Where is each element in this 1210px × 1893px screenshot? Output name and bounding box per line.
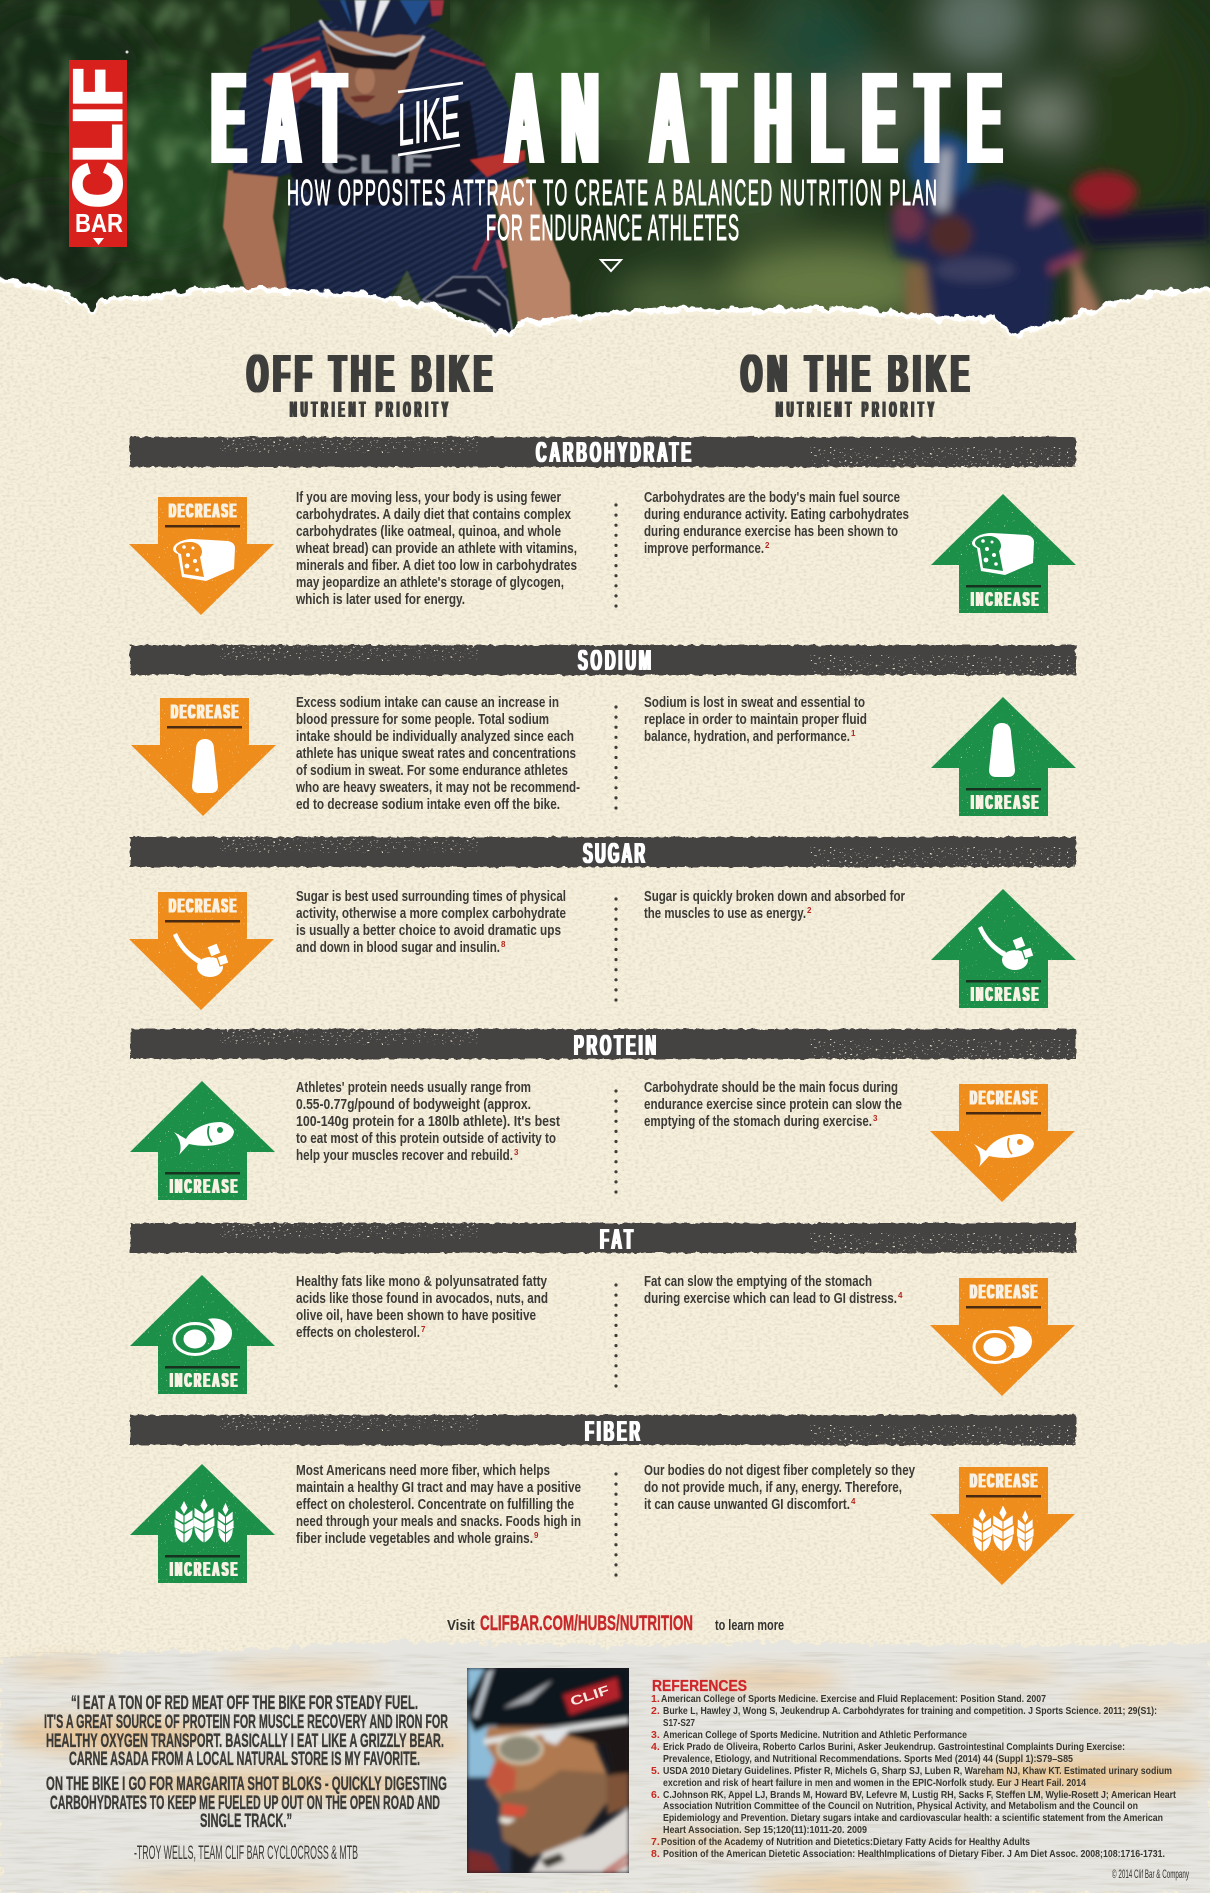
subtitle bbox=[287, 173, 937, 248]
section bar: sugar: SUGAR bbox=[583, 836, 645, 869]
section bar: sodium bbox=[130, 643, 1076, 676]
text: carbohydrate off the bike: minerals and fiber. A diet too low in carbohydrates bbox=[296, 558, 577, 574]
references: Erick Prado de Oliveira, Roberto Carlos Burini, Asker Jeukendrup. Gastrointestinal Complaints During Exercise: bbox=[663, 1741, 1125, 1753]
arrow: decrease with avocado icon: DECREASE bbox=[970, 1282, 1037, 1304]
arrow: increase with avocado icon: INCREASE bbox=[170, 1370, 237, 1392]
text: carbohydrate off the bike: may jeopardize an athlete's storage of glycogen, bbox=[296, 575, 564, 591]
dotted divider bbox=[614, 707, 618, 809]
text: sodium off the bike: who are heavy sweaters, it may not be recommend- bbox=[295, 780, 580, 796]
text: fat on the bike: 4 bbox=[898, 1291, 903, 1300]
arrow: decrease with bread icon bbox=[129, 497, 274, 615]
rider quote: IT'S A GREAT SOURCE OF PROTEIN FOR MUSCLE RECOVERY AND IRON FOR bbox=[44, 1712, 448, 1733]
references: 8. bbox=[651, 1848, 660, 1860]
text: sugar on the bike bbox=[644, 889, 905, 922]
text: fat off the bike: Healthy fats like mono & polyunsatrated fatty bbox=[296, 1274, 547, 1290]
text: fat off the bike: acids like those found in avocados, nuts, and bbox=[296, 1291, 548, 1307]
text: protein on the bike bbox=[644, 1080, 902, 1130]
text: sodium on the bike: replace in order to maintain proper fluid bbox=[644, 712, 867, 728]
call to action: visit link: to learn more bbox=[715, 1617, 784, 1634]
arrow: decrease with fish icon bbox=[930, 1084, 1075, 1202]
text: fat off the bike: 7 bbox=[421, 1325, 426, 1334]
dotted divider bbox=[614, 1474, 618, 1576]
arrow: increase with wheat icon: INCREASE bbox=[170, 1559, 237, 1581]
photo: rider portrait: CLIF bbox=[568, 1682, 611, 1709]
references bbox=[651, 1678, 1176, 1860]
references: 7. bbox=[651, 1836, 660, 1848]
references: 5. bbox=[651, 1765, 660, 1777]
arrow: increase with fish icon: INCREASE bbox=[170, 1176, 237, 1198]
column heading: on the bike: ON THE BIKE bbox=[741, 344, 969, 405]
dotted divider bbox=[614, 1091, 618, 1193]
text: protein off the bike: 100-140g protein for a 180lb athlete). It's best bbox=[296, 1114, 560, 1130]
icon: down triangle bbox=[601, 260, 621, 271]
references: Position of the Academy of Nutrition and Dietetics:Dietary Fatty Acids for Healthy Adults bbox=[661, 1836, 1030, 1848]
dotted divider bbox=[614, 1285, 618, 1387]
text: sugar on the bike: 2 bbox=[807, 906, 812, 915]
text: sugar off the bike: and down in blood sugar and insulin. bbox=[296, 940, 500, 956]
text: protein off the bike: Athletes' protein needs usually range from bbox=[296, 1080, 531, 1096]
text: carbohydrate off the bike: carbohydrates (like oatmeal, quinoa, and whole bbox=[296, 524, 561, 540]
arrow: increase with salt shaker icon: INCREASE bbox=[971, 792, 1038, 814]
text: sodium on the bike: balance, hydration, and performance. bbox=[644, 729, 850, 745]
text: sugar on the bike: the muscles to use as energy. bbox=[644, 906, 806, 922]
arrow: increase with salt shaker icon bbox=[931, 697, 1076, 816]
arrow: increase with wheat icon bbox=[130, 1464, 275, 1583]
text: carbohydrate off the bike: wheat bread) can provide an athlete with vitamins, bbox=[295, 541, 577, 557]
text: sodium off the bike bbox=[295, 695, 580, 813]
text: sugar off the bike bbox=[296, 889, 566, 956]
text: protein on the bike: endurance exercise since protein can slow the bbox=[644, 1097, 902, 1113]
section: protein bbox=[130, 1028, 1076, 1202]
text: fiber off the bike: Most Americans need more fiber, which helps bbox=[296, 1463, 550, 1479]
references: Prevalence, Etiology, and Nutritional Recommendations. Sports Med (2014) 44 (Suppl 1):S79–S85 bbox=[663, 1753, 1073, 1765]
text: fat off the bike: effects on cholesterol. bbox=[296, 1325, 420, 1341]
title bbox=[212, 44, 1001, 191]
section bar: fiber bbox=[130, 1414, 1076, 1447]
text: sodium off the bike: ed to decrease sodium intake even off the bike. bbox=[296, 797, 560, 813]
section: fiber bbox=[130, 1414, 1076, 1585]
title: LIKE bbox=[398, 82, 460, 159]
arrow: decrease with sugar spoon icon: DECREASE bbox=[169, 896, 236, 918]
subtitle: FOR ENDURANCE ATHLETES bbox=[486, 208, 739, 248]
rider quote: ON THE BIKE I GO FOR MARGARITA SHOT BLOKS - QUICKLY DIGESTING bbox=[46, 1774, 447, 1795]
text: fat on the bike: Fat can slow the emptying of the stomach bbox=[644, 1274, 872, 1290]
dotted divider bbox=[614, 899, 618, 1001]
section: sodium bbox=[130, 643, 1076, 816]
references: 4. bbox=[651, 1741, 660, 1753]
arrow: decrease with salt shaker icon bbox=[131, 698, 276, 816]
wood footer background bbox=[0, 1642, 1210, 1893]
text: sugar off the bike: 8 bbox=[501, 940, 506, 949]
text: protein off the bike bbox=[296, 1080, 560, 1164]
section bar: carbohydrate bbox=[130, 435, 1076, 468]
section bar: sodium: SODIUM bbox=[578, 643, 651, 676]
column heading: on the bike: NUTRIENT PRIORITY bbox=[776, 397, 934, 422]
title: EAT bbox=[212, 44, 345, 191]
text: carbohydrate on the bike: during endurance activity. Eating carbohydrates bbox=[644, 507, 909, 523]
text: sodium off the bike: of sodium in sweat. For some endurance athletes bbox=[296, 763, 568, 779]
text: fiber off the bike bbox=[296, 1463, 581, 1547]
rider quote: SINGLE TRACK.” bbox=[200, 1811, 292, 1832]
text: protein on the bike: emptying of the stomach during exercise. bbox=[644, 1114, 872, 1130]
text: fiber off the bike: fiber include vegetables and whole grains. bbox=[296, 1531, 533, 1547]
section bar: fat bbox=[130, 1222, 1076, 1255]
rider quote: “I EAT A TON OF RED MEAT OFF THE BIKE FOR STEADY FUEL. bbox=[71, 1693, 418, 1714]
title: AN bbox=[506, 44, 598, 191]
word: like bbox=[398, 82, 463, 159]
arrow: decrease with salt shaker icon: DECREASE bbox=[171, 702, 238, 724]
torn paper edge bbox=[0, 270, 1210, 360]
references: 2. bbox=[651, 1705, 660, 1717]
references: 6. bbox=[651, 1789, 660, 1801]
text: carbohydrate on the bike: during endurance exercise has been shown to bbox=[644, 524, 898, 540]
arrow: decrease with bread icon: DECREASE bbox=[169, 501, 236, 523]
text: fat off the bike: olive oil, have been shown to have positive bbox=[296, 1308, 536, 1324]
text: protein off the bike: 0.55-0.77g/pound of bodyweight (approx. bbox=[296, 1097, 531, 1113]
text: protein off the bike: help your muscles recover and rebuild. bbox=[296, 1148, 513, 1164]
rider quote: HEALTHY OXYGEN TRANSPORT. BASICALLY I EAT LIKE A GRIZZLY BEAR. bbox=[46, 1731, 444, 1752]
call to action: visit link: CLIFBAR.COM/HUBS/NUTRITION bbox=[480, 1612, 693, 1635]
arrow: decrease with fish icon: DECREASE bbox=[970, 1088, 1037, 1110]
arrow: decrease with wheat icon: DECREASE bbox=[970, 1471, 1037, 1493]
text: carbohydrate on the bike: Carbohydrates are the body's main fuel source bbox=[644, 490, 900, 506]
text: fiber on the bike: 4 bbox=[851, 1497, 856, 1506]
text: sodium on the bike: 1 bbox=[851, 729, 856, 738]
text: sodium off the bike: Excess sodium intake can cause an increase in bbox=[296, 695, 559, 711]
references: 3. bbox=[651, 1729, 660, 1741]
rider quote bbox=[44, 1693, 448, 1864]
references: REFERENCES bbox=[652, 1678, 747, 1695]
references: S17-S27 bbox=[663, 1717, 695, 1729]
text: protein on the bike: 3 bbox=[873, 1114, 878, 1123]
text: sodium on the bike bbox=[644, 695, 867, 745]
text: carbohydrate on the bike bbox=[644, 490, 909, 557]
references: American College of Sports Medicine. Exercise and Fluid Replacement: Position Stand. 2007 bbox=[661, 1693, 1046, 1705]
photo: rider portrait bbox=[467, 1668, 629, 1873]
text: fiber on the bike: do not provide much, if any, energy. Therefore, bbox=[644, 1480, 902, 1496]
arrow: increase with sugar spoon icon: INCREASE bbox=[971, 984, 1038, 1006]
section bar: protein bbox=[130, 1028, 1076, 1061]
column heading: off the bike: NUTRIENT PRIORITY bbox=[290, 397, 448, 422]
text: fat on the bike: during exercise which can lead to GI distress. bbox=[644, 1291, 897, 1307]
text: sugar off the bike: Sugar is best used surrounding times of physical bbox=[296, 889, 566, 905]
dotted divider bbox=[614, 505, 618, 607]
text: fiber on the bike: it can cause unwanted GI discomfort. bbox=[644, 1497, 850, 1513]
text: sodium off the bike: intake should be individually analyzed since each bbox=[296, 729, 574, 745]
references: Heart Association. Sep 15;120(11):1011-20. 2009 bbox=[663, 1824, 867, 1836]
text: carbohydrate on the bike: improve performance. bbox=[644, 541, 764, 557]
section bar: sugar bbox=[130, 836, 1076, 869]
rider in background bbox=[890, 133, 1210, 340]
text: sugar off the bike: is usually a better choice to avoid dramatic ups bbox=[296, 923, 561, 939]
text: fiber off the bike: need through your meals and snacks. Foods high in bbox=[296, 1514, 581, 1530]
lead rider bbox=[223, 0, 572, 345]
section bar: carbohydrate: CARBOHYDRATE bbox=[536, 435, 691, 468]
section bar: fat: FAT bbox=[600, 1222, 633, 1255]
text: sugar on the bike: Sugar is quickly broken down and absorbed for bbox=[644, 889, 905, 905]
section bar: fiber: FIBER bbox=[585, 1414, 640, 1447]
text: sodium on the bike: Sodium is lost in sweat and essential to bbox=[644, 695, 865, 711]
text: protein on the bike: Carbohydrate should be the main focus during bbox=[644, 1080, 898, 1096]
text: carbohydrate on the bike: 2 bbox=[765, 541, 770, 550]
rider quote: -TROY WELLS, TEAM CLIF BAR CYCLOCROSS & MTB bbox=[134, 1843, 358, 1864]
section: sugar bbox=[129, 836, 1076, 1010]
text: fiber off the bike: maintain a healthy GI tract and may have a positive bbox=[296, 1480, 581, 1496]
text: carbohydrate off the bike: which is later used for energy. bbox=[295, 592, 465, 608]
column heading: off the bike: OFF THE BIKE bbox=[247, 344, 492, 405]
references: 1. bbox=[651, 1693, 660, 1705]
call to action: visit link: Visit bbox=[447, 1617, 475, 1634]
rider quote: CARNE ASADA FROM A LOCAL NATURAL STORE IS MY FAVORITE. bbox=[69, 1749, 420, 1770]
rider quote: CARBOHYDRATES TO KEEP ME FUELED UP OUT ON THE OPEN ROAD AND bbox=[50, 1793, 440, 1814]
header photo: cyclists bbox=[0, 0, 1210, 345]
text: protein off the bike: 3 bbox=[514, 1148, 519, 1157]
arrow: decrease with wheat icon bbox=[930, 1467, 1075, 1585]
title: ATHLETE bbox=[651, 44, 1001, 191]
text: carbohydrate off the bike: carbohydrates. A daily diet that contains complex bbox=[296, 507, 571, 523]
text: protein off the bike: to eat most of this protein outside of activity to bbox=[296, 1131, 556, 1147]
Clif Bar logo: CLIF bbox=[60, 68, 136, 208]
section: fat bbox=[130, 1222, 1076, 1396]
Clif Bar logo: BAR bbox=[75, 208, 123, 238]
text: fiber off the bike: 9 bbox=[534, 1531, 539, 1540]
section bar: protein: PROTEIN bbox=[574, 1028, 656, 1061]
arrow: increase with avocado icon bbox=[130, 1275, 275, 1394]
text: sodium off the bike: athlete has unique sweat rates and concentrations bbox=[296, 746, 576, 762]
text: sodium off the bike: blood pressure for some people. Total sodium bbox=[296, 712, 549, 728]
text: carbohydrate off the bike bbox=[295, 490, 577, 608]
arrow: increase with bread icon: INCREASE bbox=[971, 589, 1038, 611]
lead rider: CLIF bbox=[323, 149, 433, 179]
references: American College of Sports Medicine. Nutrition and Athletic Performance bbox=[663, 1729, 967, 1741]
text: fat off the bike bbox=[296, 1274, 548, 1341]
text: fat on the bike bbox=[644, 1274, 903, 1307]
section: carbohydrate bbox=[129, 435, 1076, 615]
text: carbohydrate off the bike: If you are moving less, your body is using fewer bbox=[296, 490, 561, 506]
arrow: increase with bread icon bbox=[931, 494, 1076, 613]
text: sugar off the bike: activity, otherwise a more complex carbohydrate bbox=[296, 906, 566, 922]
text: fiber off the bike: effect on cholesterol. Concentrate on fulfilling the bbox=[296, 1497, 574, 1513]
text: fiber on the bike bbox=[644, 1463, 915, 1513]
arrow: increase with fish icon bbox=[130, 1081, 275, 1200]
arrow: decrease with sugar spoon icon bbox=[129, 892, 274, 1010]
text: fiber on the bike: Our bodies do not digest fiber completely so they bbox=[644, 1463, 915, 1479]
arrow: decrease with avocado icon bbox=[930, 1278, 1075, 1396]
subtitle: HOW OPPOSITES ATTRACT TO CREATE A BALANCED NUTRITION PLAN bbox=[287, 173, 937, 213]
arrow: increase with sugar spoon icon bbox=[931, 889, 1076, 1008]
references: excretion and risk of heart failure in men and women in the EPIC-Norfolk study. Eur J Heart Fail. 2014 bbox=[663, 1777, 1086, 1789]
